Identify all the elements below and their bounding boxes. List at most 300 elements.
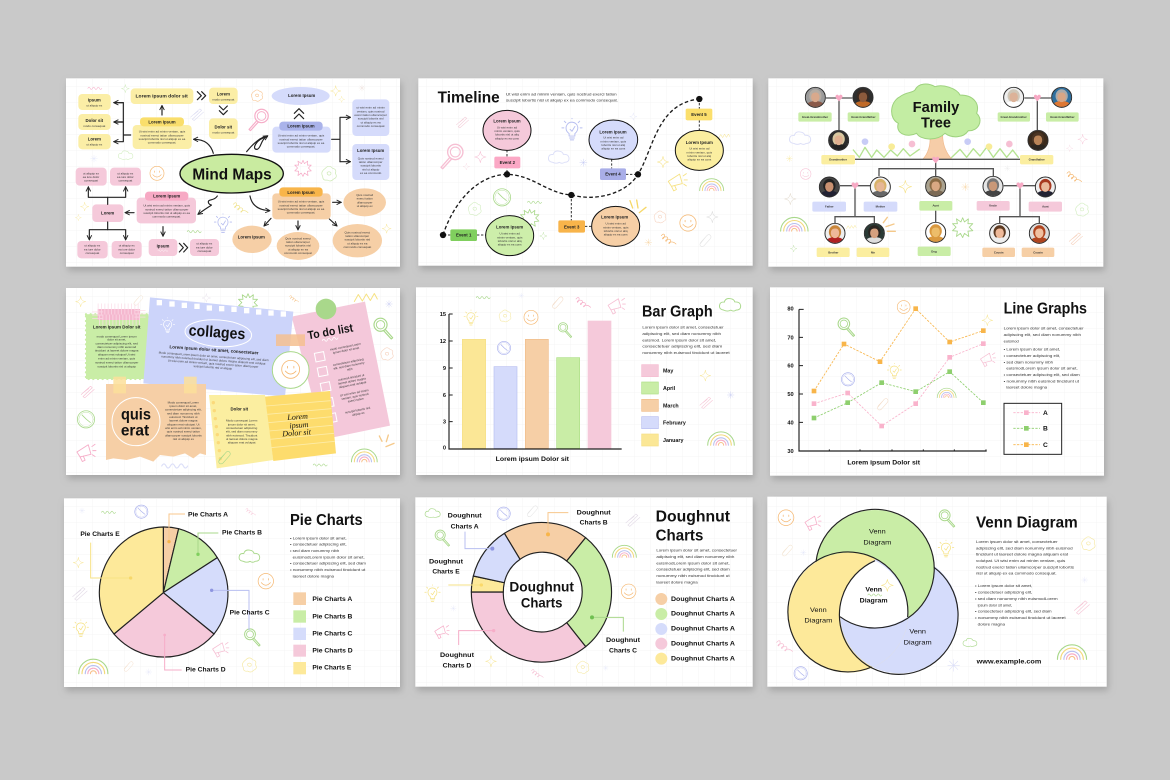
orange branch: Quis nostrud exerci <box>285 236 311 240</box>
body text: • nonummy nibh euismod tincidunt ut <box>290 567 366 572</box>
blue branch: nostrud exerci tation ullamcorper <box>279 137 323 141</box>
blue branch: ut wisi enim ad minim <box>356 106 385 110</box>
notebook: ipsum <box>289 420 309 430</box>
notebook <box>209 391 336 468</box>
website: www.example.com <box>976 659 1041 666</box>
yellow branch: ut aliquip ex <box>86 142 103 146</box>
orange branch: ut aliquip ex ea <box>288 247 308 251</box>
pie labels: Pie Charts E <box>80 531 120 538</box>
yellow branch: suscipit lobortis nisl ut aliquip ex ea <box>139 137 186 141</box>
blue branch: tation ullamcorper <box>359 160 383 164</box>
body text: • Lorem ipsum dolor sit amet, <box>975 583 1032 588</box>
blue paper: collages <box>143 297 293 397</box>
panel: line graphs <box>770 287 1104 476</box>
panel: mind maps <box>66 78 400 267</box>
legend: February <box>663 421 686 427</box>
pink paper: to do list: consectetuer adipiscing <box>333 357 364 367</box>
event 3: Event 3 <box>564 224 580 229</box>
body text: euismod. Lorem ipsum dolor sit amet, <box>642 337 716 342</box>
blue branch: suscipit lobortis nisl <box>358 117 384 121</box>
event 4 <box>589 120 641 180</box>
pink branch: consequat <box>118 179 132 183</box>
pie labels: Pie Charts C <box>230 610 270 617</box>
orange torn paper: quis erat: erat <box>121 422 149 439</box>
body text: tincidunt ut laoreet dolore magna aliquam erat <box>976 552 1069 557</box>
green paper: nostrud exerci tation ullamcorper <box>95 360 138 364</box>
event 1: aliquip ex ea cons <box>498 243 522 247</box>
panel: venn diagram <box>767 497 1107 687</box>
pink branch: ut aliquip ex <box>117 171 134 175</box>
legend: B <box>1043 426 1048 433</box>
event 1: Event 1 <box>456 233 472 238</box>
doughnut labels: Doughnut <box>577 509 612 516</box>
axes: 40 <box>787 420 794 426</box>
doughnut labels: Doughnut <box>440 652 475 659</box>
panel: timeline <box>418 78 753 266</box>
body text: consectetuer adipiscing elit, sed diam <box>656 567 730 572</box>
pink paper: to do list: exerci tation <box>347 396 364 404</box>
panel: pie charts <box>64 498 400 687</box>
blue branch: Lorem Ipsum <box>288 93 315 98</box>
doughnut labels: Charts D <box>443 663 472 670</box>
pink paper: to do list: elit, sed diam nonummy <box>333 361 365 371</box>
event 4: lobortis nisl ut aliq <box>601 143 626 147</box>
doughnut labels: Doughnut <box>606 637 641 644</box>
orange branch: suscipit lobortis nisl <box>344 238 371 242</box>
legend: Pie Charts E <box>312 665 351 672</box>
orange torn paper: quis erat: consectetuer adipiscing elit, <box>165 408 202 412</box>
body text: • Lorem ipsum dolor sit amet, <box>290 535 347 540</box>
pink branch <box>76 168 219 258</box>
orange branch: suscipit lobortis nisl ut aliquip ex ea <box>278 207 325 211</box>
leader lines <box>448 513 623 645</box>
axes <box>787 307 987 455</box>
notebook: Lorem <box>286 412 308 422</box>
dashed path <box>443 99 699 235</box>
intro text: Ut wisi enim ad minim veniam, quis nostrud exerci tation <box>506 92 617 97</box>
blue paper: collages: suscipit lobortis nisl ut aliquip <box>193 364 232 371</box>
pink branch: Ipsum <box>157 243 170 248</box>
yellow branch: Lorem Ipsum <box>148 120 176 125</box>
name labels: Dog <box>931 249 937 253</box>
yellow branch: Dolor sit <box>215 125 233 130</box>
yellow branch: Lorem <box>217 91 230 96</box>
pink branch: suscipit lobortis nisl ut aliquip ex ea <box>143 211 190 215</box>
pink branch: ea iure dolor <box>83 175 99 179</box>
name labels: Great-Grandmother <box>802 115 829 119</box>
body text: adipiscing elit, sed diam nonummy nibh <box>642 331 721 336</box>
orange branch: Lorem Ipsum <box>287 190 315 195</box>
orange branch: suscipit lobortis nisl <box>285 244 311 248</box>
pink branch: ea iure dolor <box>196 245 213 249</box>
blue branch: commodo consequat <box>357 124 385 128</box>
doughnut labels: Charts B <box>580 520 608 527</box>
axis title: Lorem ipsum Dolor sit <box>847 459 921 466</box>
portraits <box>805 87 1072 244</box>
event 5 <box>675 96 723 170</box>
axes: 80 <box>787 307 794 313</box>
name labels: Father <box>825 205 835 209</box>
doughnut labels: Charts E <box>432 569 460 576</box>
body text: • sed diam nonummy nibh euismodLorem <box>975 596 1058 601</box>
event 5: Lorem Ipsum <box>686 140 713 145</box>
pink branch: consequat <box>120 251 134 255</box>
doughnut labels: Charts A <box>451 523 479 530</box>
heading: Venn Diagram <box>976 514 1078 531</box>
orange branch: ut aliquip ex ea <box>347 241 368 245</box>
axes: 3 <box>443 420 446 426</box>
body text: euismodLorem ipsum dolor sit amet, <box>293 554 365 559</box>
yellow branch: Ipsum <box>88 97 101 102</box>
green paper: suscipit lobortis nisl ut aliquip <box>97 364 136 368</box>
blue paper: collages: nonummy nibh euismod tincidunt ut laoreet dolore magna aliquam erat volutpat <box>161 354 266 366</box>
body text: • sed diam nonummy nibh <box>1004 359 1053 364</box>
body text: Lorem ipsum dolor sit amet, consectetuer <box>642 325 724 330</box>
legend: April <box>663 386 676 392</box>
axes: 9 <box>443 366 446 372</box>
pink branch: ut aliquip ex <box>119 244 135 248</box>
pie labels: Pie Charts B <box>222 530 262 537</box>
slide background <box>64 498 400 687</box>
body text: nisl ut aliquip ex ea commodo consequat. <box>976 571 1057 576</box>
doodles <box>76 293 394 468</box>
yellow branch: commodo consequat. <box>148 141 176 145</box>
pink paper: to do list <box>292 302 390 439</box>
pink branch: Lorem <box>101 211 114 216</box>
center node: Mind Maps <box>192 166 272 183</box>
doodles <box>781 132 1088 252</box>
name labels: Mother <box>876 205 886 209</box>
name labels: Grandmother <box>829 158 848 162</box>
event 5: Event 5 <box>691 112 707 117</box>
orange torn paper: quis erat: ipsum dolor sit amet, <box>170 404 197 408</box>
orange torn paper: quis erat: Modo consequat Lorem <box>168 400 200 404</box>
event 1: lobortis nisl ut aliq <box>498 239 522 243</box>
pink branch: ut aliquip ex <box>84 244 101 248</box>
pink paper: to do list: euismod tincidunt ut <box>338 373 365 382</box>
green paper: aliquam erat volutpat Ut wisi <box>98 352 136 356</box>
legend: March <box>663 403 679 409</box>
doodles <box>441 113 730 247</box>
center label: Doughnut <box>509 580 574 595</box>
legend: Pie Charts C <box>312 631 353 638</box>
body text: • sed diam nonummy nibh <box>290 548 339 553</box>
doodles <box>464 293 741 445</box>
body text: adipiscing elit, sed diam nonummy nibh <box>1004 332 1081 337</box>
yellow branch: modo consequat <box>212 131 235 135</box>
venn labels: Diagram <box>860 597 888 604</box>
blue branch: Lorem Ipsum <box>357 148 384 153</box>
intro text <box>506 92 618 103</box>
body text: dolore magna <box>978 621 1006 626</box>
pink paper: to do list: nibh <box>347 367 353 372</box>
doodles <box>425 506 640 677</box>
name labels: Aunt <box>1042 205 1049 209</box>
body text: • Lorem ipsum dolor sit amet, <box>1004 347 1060 352</box>
event 1 <box>440 216 534 256</box>
orange torn paper: quis erat: laoreet dolore magna <box>169 419 198 423</box>
center node <box>180 154 283 193</box>
body text: • consectetuer adipiscing elit, sed diam <box>975 609 1052 614</box>
orange branch: commodo consequat <box>284 251 312 255</box>
orange torn paper: quis erat: sed diam nonummy nibh <box>167 411 200 415</box>
heading: Bar Graph <box>642 304 713 321</box>
body text: • consectetuer adipiscing elit, <box>290 542 347 547</box>
event 2: aliquip ex ea cons <box>495 136 519 140</box>
event 4: Lorem Ipsum <box>599 129 627 134</box>
green paper <box>86 309 148 379</box>
legend: January <box>663 438 683 444</box>
slide background <box>767 497 1107 687</box>
bars <box>462 321 611 448</box>
pink branch: consequat <box>85 251 99 255</box>
heading: Charts <box>656 528 703 545</box>
green paper: Lorem Ipsum Dolor sit <box>93 325 141 330</box>
doughnut labels: Doughnut <box>429 558 464 565</box>
panel: doughnut charts <box>415 497 753 687</box>
slide background <box>415 497 753 687</box>
event 2: lobortis nisl ut aliq <box>495 133 519 137</box>
orange torn paper: quis erat: euismod. Tincidunt ut <box>169 415 198 419</box>
body text: • nonummy nibh euismod tincidunt ut <box>1004 378 1080 383</box>
family lines <box>826 95 1051 223</box>
legend: May <box>663 369 673 375</box>
blue branch: suscipit lobortis <box>360 164 381 168</box>
blue branch: nisl ut aliquip <box>362 167 380 171</box>
blue branch: ut aliquip ex ea <box>361 120 381 124</box>
central arrows <box>194 136 269 214</box>
body text: laoreet dolore magna <box>1006 385 1048 390</box>
legend <box>642 365 686 446</box>
event 4: Event 4 <box>605 172 621 177</box>
body text <box>290 535 367 578</box>
pie labels: Pie Charts A <box>188 512 228 519</box>
pink paper: to do list: laoreet dolore magna <box>338 376 367 386</box>
name labels: Great-Grandmother <box>1001 115 1028 119</box>
slide background <box>66 288 400 475</box>
event 5: aliquip ex ea cons <box>687 158 712 162</box>
axes: 6 <box>443 393 446 399</box>
axes: 30 <box>787 449 794 455</box>
blue paper: collages: Modo consequat Lorem ipsum dolor sit amet, consectetuer adipiscing elit, sed diam <box>159 351 269 362</box>
slide background <box>416 287 753 475</box>
smiley badge and tape <box>272 299 336 388</box>
body text: • consectetuer adipiscing elit, sed diam <box>1004 372 1080 377</box>
heading: Pie Charts <box>290 512 363 529</box>
pink branch: consequat <box>197 249 211 253</box>
body text: nonummy nibh euismod tincidunt ut laoreet <box>642 350 731 355</box>
legend: Doughnut Charts A <box>671 626 735 633</box>
orange torn paper: quis erat: ullamcorper suscipit lobortis <box>165 433 202 437</box>
body text <box>642 325 731 355</box>
venn circles <box>788 509 959 674</box>
body text: nonummy nibh euismod tincidunt ut <box>656 573 731 578</box>
body text: Lorem ipsum dolor sit amet, consectetuer <box>656 548 738 553</box>
legend: Doughnut Charts A <box>671 611 735 618</box>
pink branch: Lorem Ipsum <box>153 194 180 199</box>
center label <box>509 580 574 611</box>
blue branch: exerci tation ullamcorper <box>354 113 387 117</box>
orange branch: tation ullamcorper <box>286 240 310 244</box>
body text: euismod <box>1004 338 1019 343</box>
yellow branch: nostrud exerci tation ullamcorper <box>140 133 184 137</box>
orange branch: exerci tation <box>357 197 373 201</box>
leader lines <box>91 514 249 670</box>
orange branch: Ut wisi enim ad minim veniam, quis <box>278 200 325 204</box>
event 5: Ut wisi enim ad <box>689 147 710 151</box>
doughnut labels <box>429 509 641 670</box>
doughnut labels: Charts C <box>609 647 637 654</box>
series B <box>812 369 986 420</box>
notebook: ipsum dolor sit amet, <box>228 422 256 426</box>
orange branch: ut aliquip ex <box>357 204 373 208</box>
green paper: consectetuer adipiscing elit, sed <box>96 341 138 345</box>
orange branch: tation ullamcorper <box>345 234 369 238</box>
orange torn paper: quis erat: quis <box>121 406 151 423</box>
body text: laoreet dolore magna <box>656 579 699 584</box>
pink branch: Ut wisi enim ad minim veniam, quis <box>143 204 190 208</box>
body text: ipsum dolor sit amet, <box>978 602 1012 607</box>
pie chart <box>99 527 228 657</box>
legend: C <box>1043 442 1048 449</box>
pie labels: Pie Charts D <box>186 667 226 674</box>
body text: • consectetuer adipiscing elit, <box>975 590 1032 595</box>
body text: • consectetuer adipiscing elit, <box>1004 353 1060 358</box>
pink branch: consequat <box>84 179 98 183</box>
yellow branch: Lorem <box>88 137 101 142</box>
doodles <box>838 301 996 410</box>
center label: Charts <box>521 596 563 611</box>
notebook: Dolor sit <box>231 407 249 412</box>
intro text: suscipit lobortis nisl ut aliquip ex ea commodo consequat. <box>506 98 618 103</box>
body text: consectetuer adipiscing elit, sed diam <box>642 344 723 349</box>
blue paper: collages: Ut wisi enim ad minim veniam, quis nostrud exerci tation ullamcorper <box>168 358 258 369</box>
venn labels: Diagram <box>804 618 832 625</box>
yellow branch: ut aliquip ex <box>86 103 103 107</box>
event 3: aliquip ex ea cons <box>604 233 628 237</box>
legend <box>1004 403 1062 454</box>
green paper: diam nonummy nibh euismod <box>97 345 136 349</box>
orange branch: Quis nostrud exerci <box>344 230 371 234</box>
green paper: tincidunt ut laoreet dolore magna <box>95 349 139 353</box>
event 4: aliquip ex ea cons <box>601 147 626 151</box>
pink branch: ea iure dolor <box>84 247 101 251</box>
body text: adipiscing elit, sed diam nonummy nibh <box>656 554 734 559</box>
event 5: lobortis nisl ut aliq <box>687 154 712 158</box>
body text: Lorem ipsum dolor sit amet, consectetuer <box>976 539 1058 544</box>
event 3: Ut wisi enim ad <box>606 222 626 226</box>
name labels: Grandfather <box>1029 158 1046 162</box>
event 4: Ut wisi enim ad <box>603 136 624 140</box>
orange branch: Lorem Ipsum <box>238 235 265 240</box>
body text: laoreet dolore magna <box>293 573 335 578</box>
orange branch: commodo consequat. <box>287 211 315 215</box>
venn labels: Venn <box>810 607 827 614</box>
name labels: Cousin <box>994 250 1004 254</box>
body text: • consectetuer adipiscing elit, sed diam <box>290 561 367 566</box>
orange branch <box>232 187 386 260</box>
axes: 12 <box>440 339 446 345</box>
axes: 60 <box>787 364 794 370</box>
venn labels: Venn <box>869 529 886 536</box>
event 2: minim veniam, quis <box>494 129 520 133</box>
body text: nostrud exerci tation ullamcorper suscipit lobortis <box>976 564 1074 569</box>
panel: bar graph <box>416 287 753 475</box>
tree <box>892 84 980 159</box>
axes <box>440 312 622 451</box>
axes: 0 <box>443 445 446 451</box>
doodles <box>777 510 1095 680</box>
notebook: consectetuer adipiscing <box>226 426 258 430</box>
blue branch: ex ea commodo <box>360 171 382 175</box>
pink paper: to do list: aliquam erat volutpat <box>339 380 367 389</box>
blue branch: suscipit lobortis nisl ut aliquip ex ea <box>278 141 325 145</box>
name labels: Great-Grandfather <box>1050 115 1075 119</box>
pink branch: commodo consequat. <box>152 215 181 219</box>
event 1: Lorem Ipsum <box>496 225 523 230</box>
legend: Pie Charts D <box>312 648 353 655</box>
title: Timeline <box>438 89 500 106</box>
orange branch: ullamcorper <box>357 200 372 204</box>
panel: family tree <box>768 78 1103 267</box>
axes: 50 <box>787 392 794 398</box>
green paper: dolor sit amet, <box>107 338 126 342</box>
legend: Doughnut Charts A <box>671 641 735 648</box>
blue branch: commodo consequat. <box>287 145 315 149</box>
yellow branch: modo consequat <box>212 97 235 101</box>
body text: euismodLorem ipsum dolor sit amet, <box>1006 366 1078 371</box>
notebook: Dolor sit <box>281 427 312 438</box>
venn labels: Venn <box>865 587 882 594</box>
body text <box>975 539 1074 626</box>
orange torn paper: quis erat: quis nostrud exerci tation <box>167 430 200 434</box>
notebook: ut laoreet dolore magna <box>226 437 258 441</box>
event 3: Lorem Ipsum <box>601 215 628 220</box>
pink branch: nostrud exerci tation ullamcorper <box>145 207 188 211</box>
axis title: Lorem ipsum Dolor sit <box>496 456 570 463</box>
body text: • nonummy nibh euismod tincidunt ut laoreet <box>975 615 1067 620</box>
body text <box>656 548 738 584</box>
notebook: elit, sed diam nonummy <box>226 430 258 434</box>
yellow branch: Ut wisi enim ad minim veniam, quis <box>139 130 186 134</box>
notebook: Modo consequat Lorem <box>226 419 258 423</box>
blue paper: collages: collages <box>188 322 246 343</box>
event 5: minim veniam, quis <box>687 150 713 154</box>
body text: volutpat. Ut wisi enim ad minim veniam, quis <box>976 558 1065 563</box>
panel: collages <box>66 288 400 475</box>
name labels: Me <box>871 250 875 254</box>
event 4: minim veniam, quis <box>601 139 627 143</box>
body text: adipiscing elit, sed diam nonummy nibh euismod <box>976 545 1073 550</box>
slide background <box>768 78 1103 267</box>
pink paper: to do list: aliquip ex <box>352 411 365 417</box>
blue paper: collages: Lorem ipsum dolor sit amet, consectetuer <box>169 344 259 355</box>
heading: Line Graphs <box>1004 300 1087 317</box>
event 1: Ut wisi enim ad <box>500 232 520 236</box>
name labels: Brother <box>828 250 839 254</box>
pink paper: to do list: Ut wisi enim ad minim <box>340 388 369 398</box>
pink branch: ea iure dolor <box>118 247 135 251</box>
pink paper: to do list: veniam, quis nostrud <box>341 392 369 401</box>
legend <box>293 592 353 674</box>
legend: A <box>1043 410 1048 417</box>
blue branch: Lorem Ipsum <box>287 124 315 129</box>
yellow branch: modo consequat <box>83 124 106 128</box>
blue branch: Ut wisi enim ad minim veniam, quis <box>278 134 325 138</box>
venn labels: Diagram <box>863 540 891 547</box>
name labels: Great-Grandfather <box>851 115 876 119</box>
orange branch: Quis nostrud <box>356 193 373 197</box>
